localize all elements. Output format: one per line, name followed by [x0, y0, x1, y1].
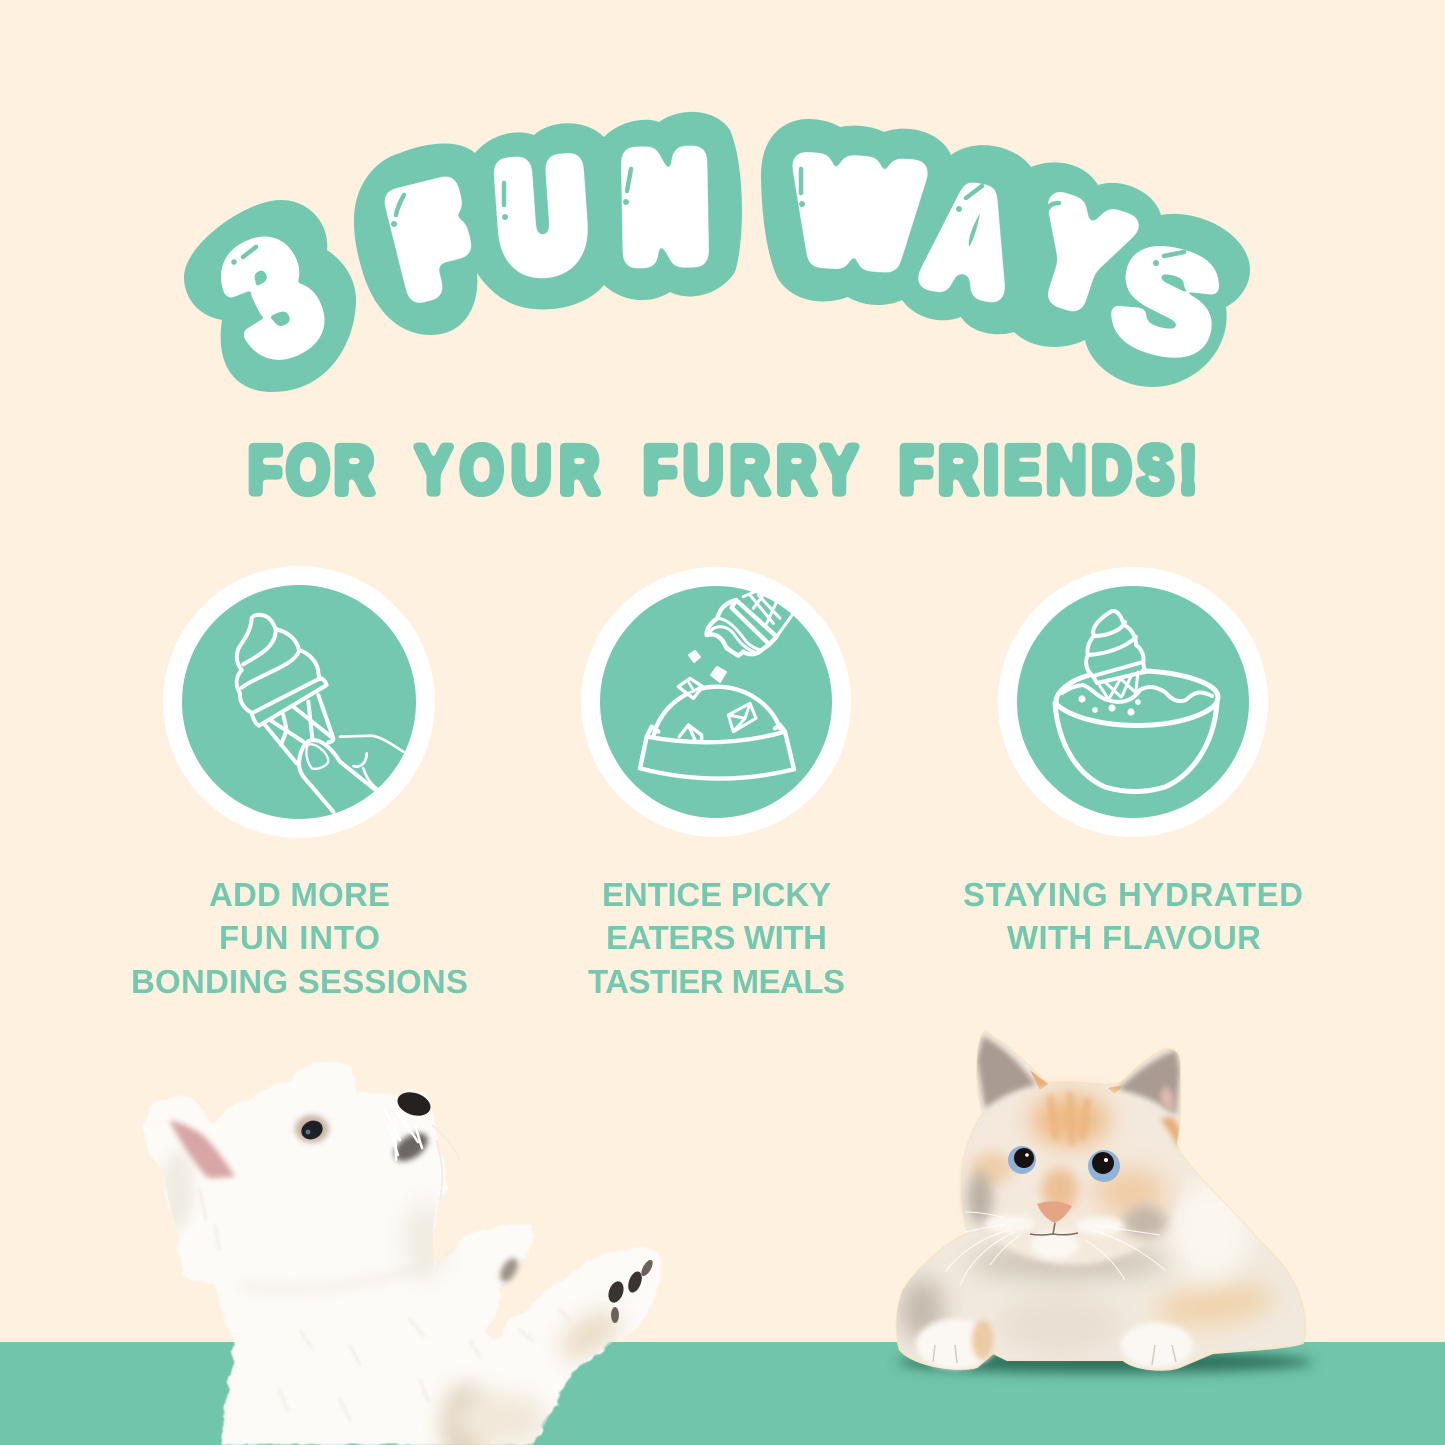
panel: way 1 bonding [131, 566, 468, 1000]
caption 3: WITH FLAVOUR [1007, 919, 1261, 956]
title letters: U [496, 136, 588, 296]
cat ears [977, 1036, 1180, 1115]
green floor band [0, 1342, 1445, 1445]
dog nose and muzzle [385, 1088, 460, 1200]
title letters 3 and S [200, 203, 1232, 393]
icon: ice cream dipped in water bowl [1055, 611, 1218, 792]
dog eye [295, 1115, 329, 1143]
caption 1: FUN INTO [219, 919, 380, 956]
subtitle: FOR YOUR FURRY FRIENDS! [248, 433, 1197, 508]
cat face markings [967, 1092, 1167, 1259]
subtitle: FOR YOUR FURRY FRIENDS!: FURRY [643, 433, 858, 508]
illustration: cream cat [897, 1032, 1313, 1373]
dog ear [169, 1120, 235, 1178]
cat whiskers [945, 1212, 1165, 1285]
caption 1 [131, 876, 468, 1000]
illustration: white dog [144, 1062, 660, 1445]
title gloss highlights [231, 169, 1184, 266]
panel: way 2 picky eaters [581, 567, 851, 1000]
dog body silhouette [144, 1062, 660, 1445]
title letters: Y [1022, 177, 1138, 335]
cat shadow [897, 1351, 1313, 1373]
caption 2: EATERS WITH [606, 919, 827, 956]
cat fur shading [900, 1036, 1277, 1355]
cat nose and mouth [1030, 1201, 1078, 1235]
title letters: N [624, 130, 706, 285]
caption 3: STAYING HYDRATED [963, 876, 1303, 913]
icon circle 1 [163, 566, 435, 838]
caption 2: TASTIER MEALS [588, 963, 845, 1000]
cat silhouette [897, 1032, 1305, 1370]
title letters: A [920, 161, 1020, 318]
title letters: F [381, 159, 481, 320]
cat paws [916, 1319, 1193, 1369]
icon: water droplets [1078, 695, 1141, 716]
caption 1: BONDING SESSIONS [131, 963, 468, 1000]
dog fur shading [162, 1150, 629, 1445]
panel: way 3 hydration [963, 567, 1303, 956]
subtitle: FOR YOUR FURRY FRIENDS!: YOUR [415, 433, 600, 508]
icon: falling food cubes [689, 651, 726, 682]
title backing blobs [184, 112, 1250, 392]
icon: hand holding ice cream [237, 615, 403, 812]
caption 2: ENTICE PICKY [602, 876, 831, 913]
icon circle 2 [581, 567, 851, 837]
title letters: W [795, 137, 919, 290]
title letters 3 and S: 3 [200, 203, 345, 393]
title: 3 FUN WAYS [184, 112, 1250, 393]
subtitle: FOR YOUR FURRY FRIENDS!: FRIENDS! [899, 433, 1197, 508]
title letters [381, 130, 1138, 335]
title letters 3 and S: S [1102, 216, 1232, 387]
subtitle: FOR YOUR FURRY FRIENDS!: FOR [248, 433, 374, 508]
dog paw pads [496, 1255, 655, 1323]
caption 3 [963, 876, 1303, 956]
icon circle 3 [998, 567, 1268, 837]
cat head [963, 1085, 1183, 1265]
cat eyes [1008, 1146, 1120, 1182]
caption 2 [588, 876, 845, 1000]
caption 1: ADD MORE [209, 876, 390, 913]
icon: ice cream crumbled over food bowl [640, 592, 794, 779]
